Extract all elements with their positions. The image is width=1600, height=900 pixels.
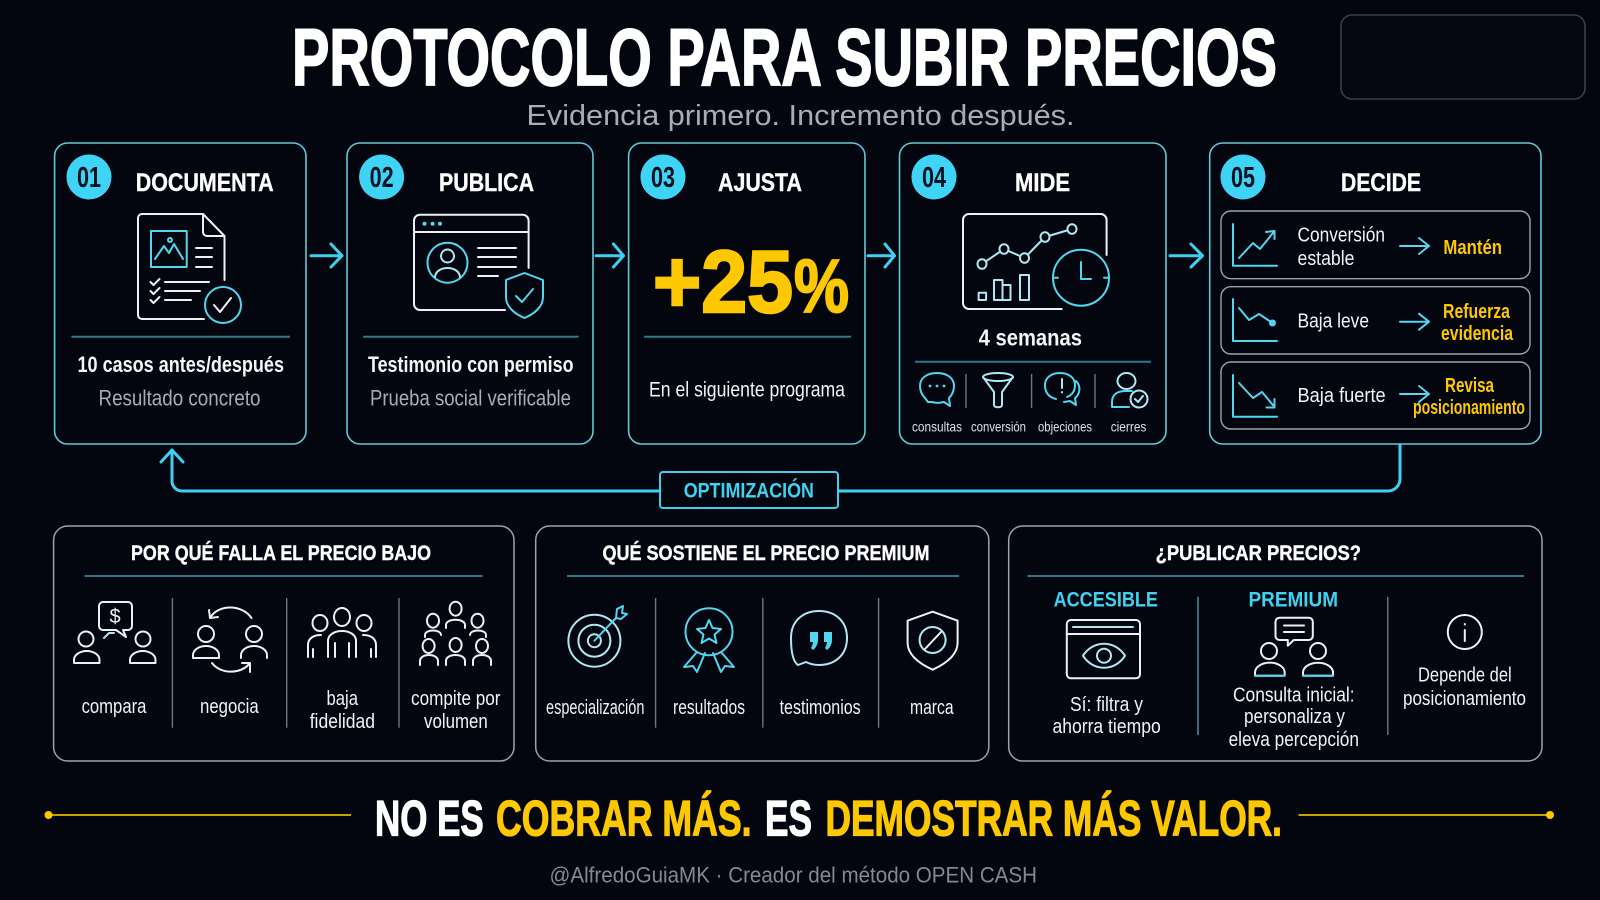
decision row: conversion estable: estable	[1298, 248, 1354, 270]
optimization badge	[660, 472, 838, 508]
icon: target	[568, 606, 627, 667]
decision row: conversion estable: Mantén	[1443, 237, 1502, 259]
big number +25%: %	[794, 244, 849, 328]
column: premium: personaliza y	[1244, 706, 1345, 728]
heading: QUÉ SOSTIENE EL PRECIO PREMIUM	[602, 542, 930, 565]
metric labels: cierres	[1111, 419, 1146, 435]
icon: cierres	[1112, 373, 1148, 408]
icon: compara: $	[109, 606, 121, 628]
slogan: ES	[765, 791, 812, 847]
step number 02: 02	[370, 162, 394, 194]
icon: document	[138, 214, 241, 323]
step number 01	[66, 154, 112, 200]
panel: step 01 documenta	[55, 143, 306, 444]
labels: fidelidad	[310, 711, 375, 733]
labels: marca	[910, 697, 954, 719]
labels	[82, 688, 501, 733]
decision row: baja leve: evidencia	[1441, 323, 1514, 345]
decision row: baja leve: Refuerza	[1443, 301, 1511, 323]
footer credit: @AlfredoGuiaMK · Creador del método OPEN CASH	[550, 863, 1037, 888]
metric labels: objeciones	[1038, 419, 1092, 435]
metric labels: conversión	[971, 419, 1026, 435]
slogan: NO ES	[375, 791, 484, 847]
arrow 1 to 2	[311, 244, 342, 267]
column: depende: Depende del	[1418, 665, 1512, 687]
text: prueba social: Prueba social verificable	[370, 386, 571, 411]
column: premium	[1229, 589, 1359, 751]
step number 05: 05	[1231, 162, 1255, 194]
labels: especialización	[546, 697, 644, 719]
big number +25%: +25	[653, 232, 793, 331]
subtitle: Evidencia primero. Incremento después.	[526, 100, 1074, 132]
slogan line left	[44, 811, 351, 819]
metric labels: consultas	[912, 419, 962, 435]
icon: chart and clock	[963, 214, 1109, 309]
labels: volumen	[424, 711, 488, 733]
heading documenta: DOCUMENTA	[136, 169, 274, 197]
column: accesible	[1052, 589, 1161, 738]
heading: POR QUÉ FALLA EL PRECIO BAJO	[131, 542, 431, 565]
step number 04: 04	[922, 162, 946, 194]
icon: medal	[684, 608, 734, 672]
arrow 3 to 4	[868, 244, 894, 267]
text: testimonio: Testimonio con permiso	[368, 352, 574, 377]
decision row: baja fuerte: posicionamiento	[1413, 397, 1525, 419]
step number 03: 03	[651, 162, 675, 194]
icon: shield brand	[908, 612, 958, 670]
icon: compite por volumen	[420, 602, 491, 665]
empty logo box	[1341, 15, 1585, 99]
slogan line right	[1298, 811, 1554, 819]
step number 02	[359, 154, 404, 200]
column: accesible: ahorra tiempo	[1052, 716, 1161, 738]
decision row: baja fuerte: Revisa	[1445, 375, 1495, 397]
column: depende	[1403, 615, 1526, 710]
panel: publicar precios	[1009, 526, 1542, 761]
icon: info	[1448, 615, 1482, 649]
labels: baja	[326, 688, 359, 710]
text: en el siguiente programa: En el siguiente programa	[649, 379, 845, 402]
icon: compara	[74, 602, 156, 663]
decision row: conversion estable: Conversión	[1298, 225, 1385, 247]
icon: objeciones	[1045, 373, 1079, 405]
slogan	[375, 791, 1282, 847]
panel: step 04 mide	[900, 143, 1166, 444]
icon: negocia	[193, 608, 267, 672]
panel: por qué falla el precio bajo	[54, 526, 514, 761]
icon: baja fidelidad	[308, 608, 376, 657]
labels: compite por	[411, 688, 501, 710]
arrow 4 to 5	[1170, 244, 1202, 267]
icon: funnel	[983, 373, 1013, 407]
slogan: DEMOSTRAR MÁS VALOR.	[826, 791, 1282, 847]
icon: browser with eye	[1067, 620, 1140, 678]
icon: consultation	[1255, 618, 1333, 676]
heading ajusta: AJUSTA	[718, 169, 802, 197]
icon: browser with shield	[414, 215, 543, 318]
column: depende: posicionamiento	[1403, 688, 1526, 710]
decision row: baja fuerte	[1221, 362, 1530, 429]
panel: step 05 decide	[1210, 143, 1541, 444]
panel: step 03 ajusta	[629, 143, 865, 444]
icon: speech quote	[791, 611, 847, 665]
optimization badge: OPTIMIZACIÓN	[684, 479, 814, 503]
text: 10 casos: 10 casos antes/después	[78, 352, 284, 377]
heading publica: PUBLICA	[439, 169, 534, 197]
panel: step 02 publica	[347, 143, 593, 444]
heading decide: DECIDE	[1341, 169, 1421, 197]
column: premium: PREMIUM	[1248, 589, 1338, 612]
arrow 2 to 3	[596, 244, 624, 267]
column: premium: Consulta inicial:	[1233, 685, 1355, 707]
step number 04	[912, 154, 956, 200]
text: 4 semanas: 4 semanas	[979, 325, 1082, 351]
column: accesible: ACCESIBLE	[1054, 589, 1158, 612]
labels: testimonios	[780, 697, 861, 719]
step number 01: 01	[77, 162, 101, 194]
decision row: baja leve: Baja leve	[1298, 311, 1369, 333]
labels: negocia	[200, 696, 259, 718]
feedback loop arrow	[161, 445, 1400, 508]
slogan: COBRAR MÁS.	[496, 791, 752, 847]
panel: qué sostiene el precio premium	[536, 526, 989, 761]
icon: consultas	[920, 373, 954, 406]
text: resultado concreto: Resultado concreto	[98, 386, 260, 411]
step number 03	[640, 154, 686, 200]
labels	[546, 697, 954, 719]
labels: resultados	[673, 697, 745, 719]
decision row: baja fuerte: Baja fuerte	[1298, 385, 1386, 407]
column: accesible: Sí: filtra y	[1070, 694, 1143, 716]
column: premium: eleva percepción	[1229, 729, 1359, 751]
heading mide: MIDE	[1015, 169, 1070, 197]
labels: compara	[82, 696, 147, 718]
metric labels	[912, 419, 1146, 435]
heading: ¿PUBLICAR PRECIOS?	[1156, 542, 1361, 565]
decision row: baja leve	[1221, 287, 1530, 354]
step number 05	[1220, 154, 1266, 200]
decision row: conversion estable	[1221, 211, 1530, 279]
